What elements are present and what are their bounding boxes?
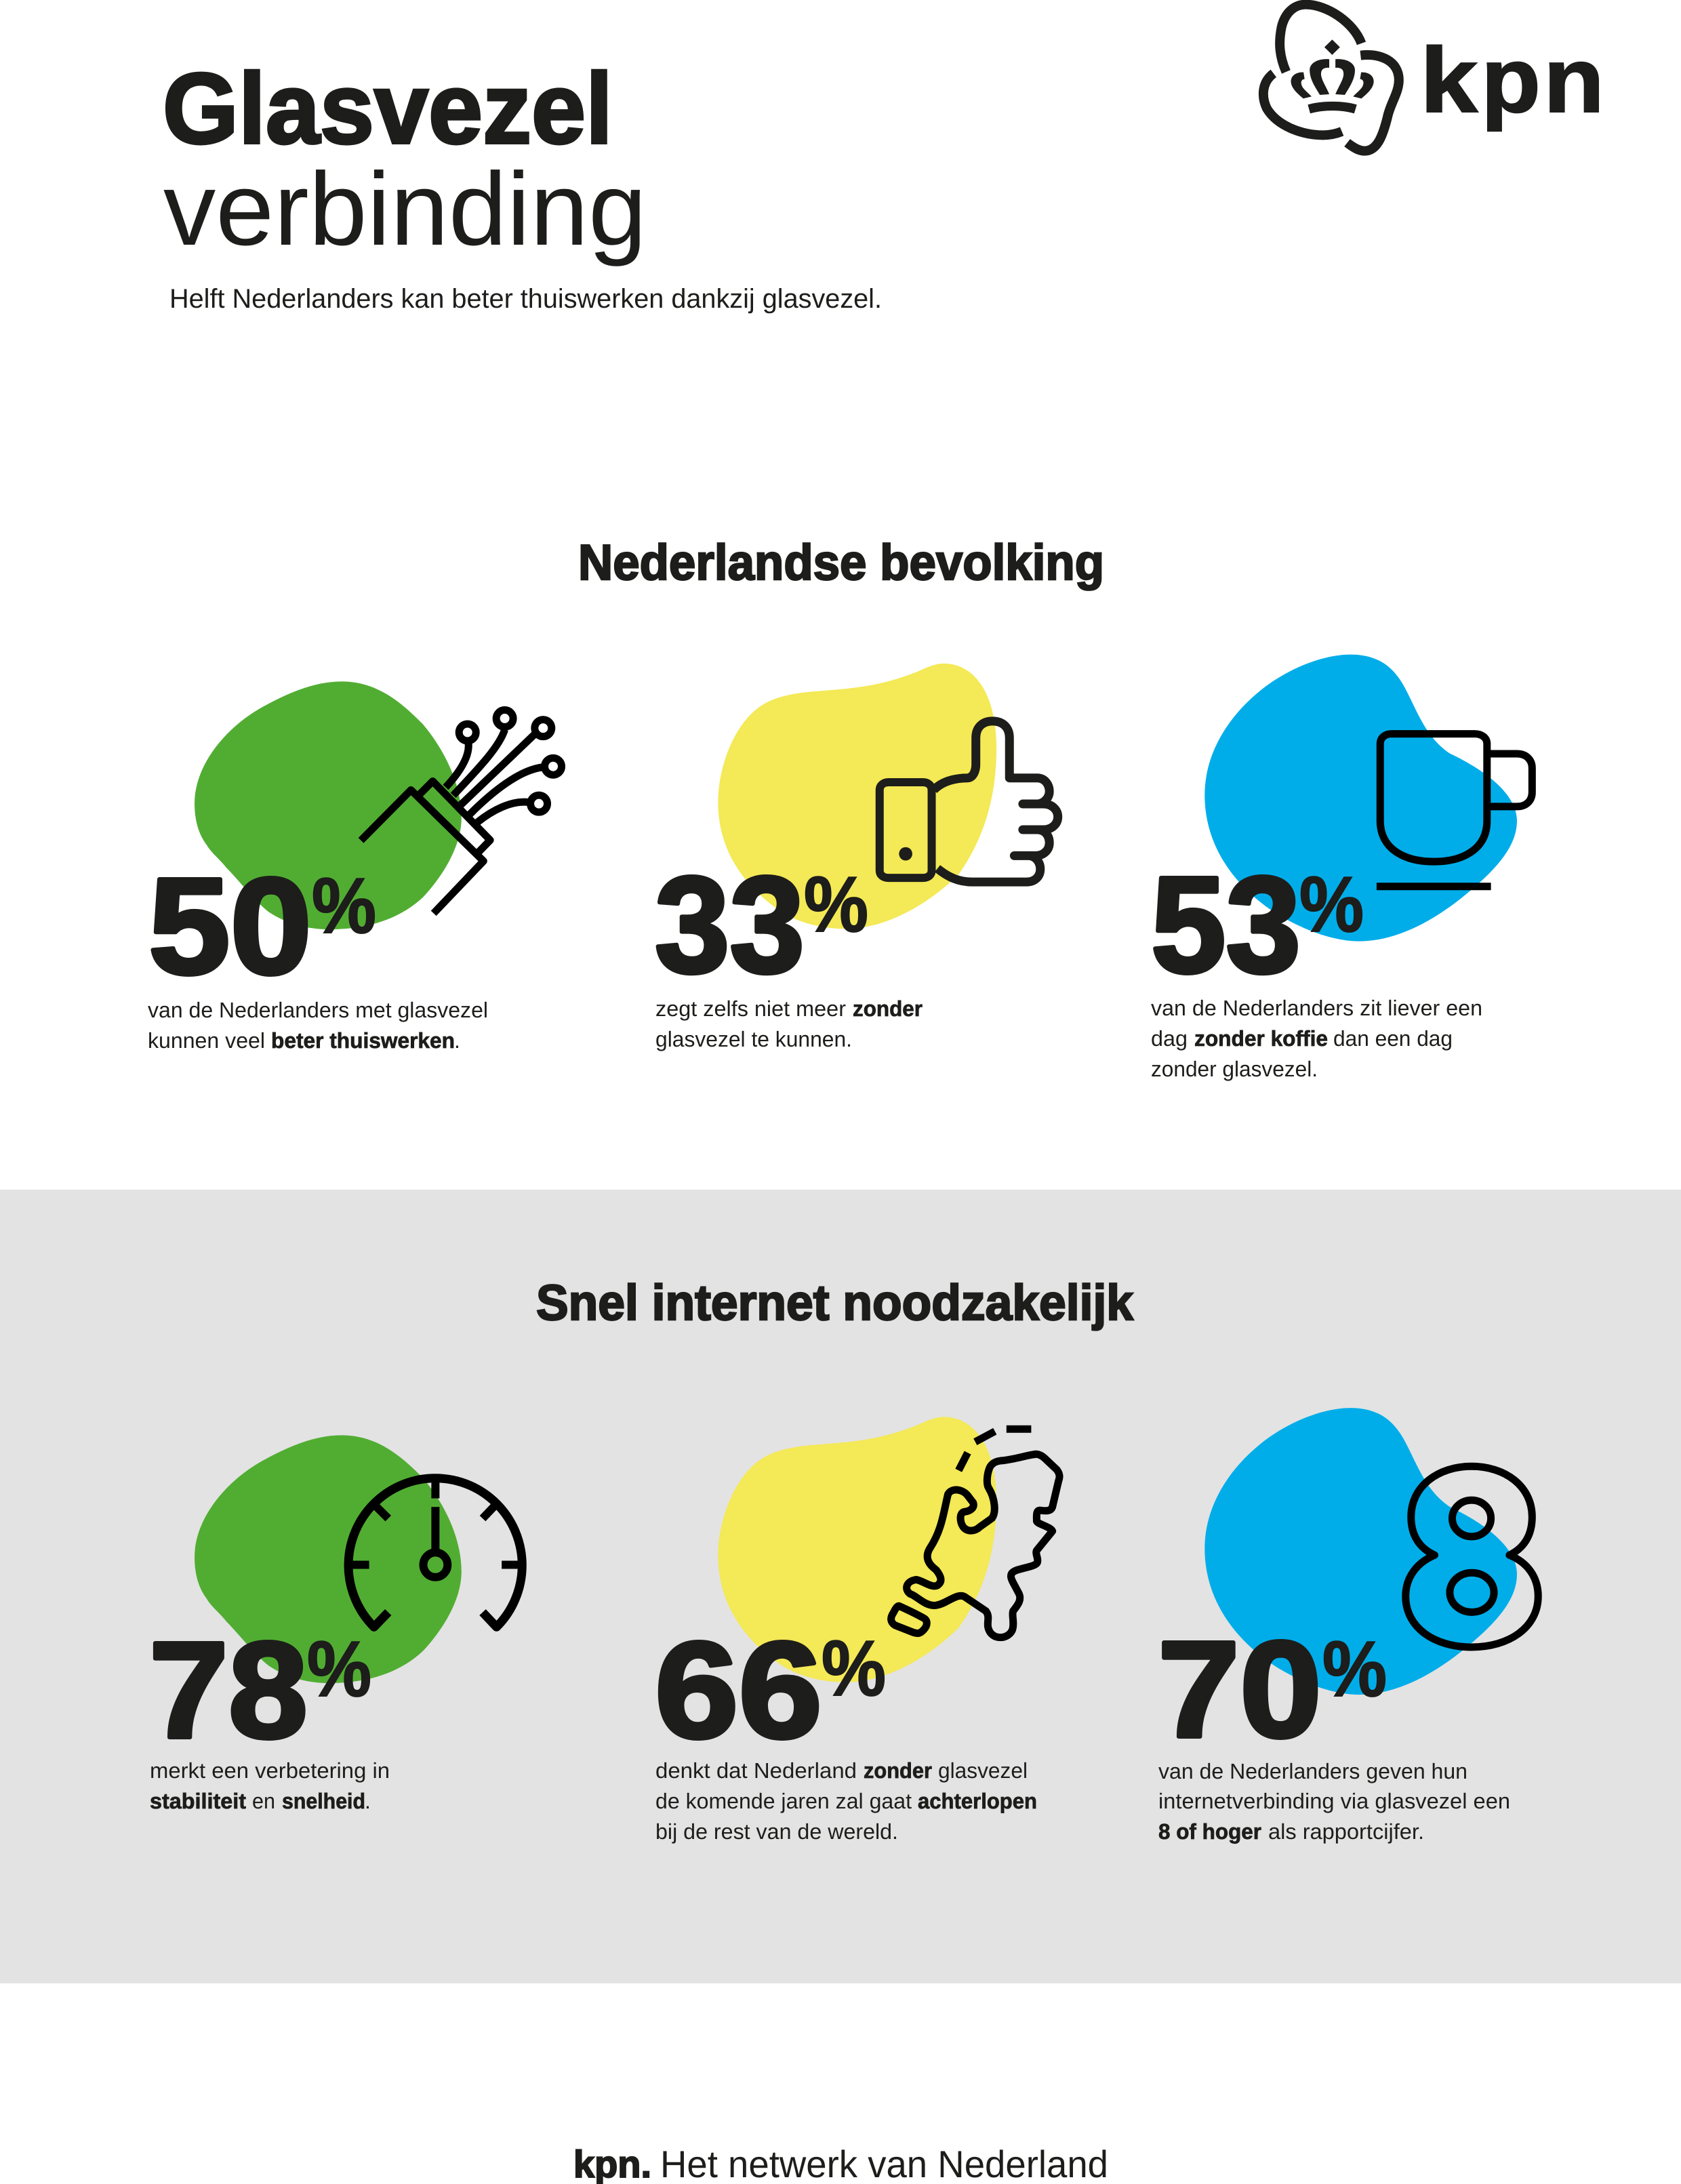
description: achterlopen [918,1789,1037,1813]
heading: Nederlandse bevolking: Nederlandse bevolking [578,534,1104,590]
percent sign: % [307,1625,371,1713]
logo wordmark: k [1420,28,1478,132]
logo: kpn [1263,5,1604,151]
icon: speedometer [348,1478,522,1627]
description: van de Nederlanders met glasvezel [148,998,488,1022]
panel: 70% [1158,1408,1538,1844]
description: zonder [864,1758,932,1783]
icon: thumbs up [880,721,1058,882]
description: zonder [853,996,923,1021]
description: de komende jaren zal gaat [655,1789,912,1813]
description: . [365,1789,371,1813]
logo wordmark [1420,28,1604,132]
panel: 53% [1151,655,1532,1081]
description: zegt zelfs niet meer [655,996,846,1021]
description: van de Nederlanders zit liever een [1151,996,1482,1020]
description [1158,1759,1510,1844]
description: 8 of hoger [1158,1819,1261,1844]
title: verbinding [163,151,647,267]
description: van de Nederlanders geven hun [1158,1759,1467,1783]
percent sign: % [804,860,868,948]
percent sign: % [822,1624,886,1712]
icon: fibre optic cable [361,710,562,913]
statistic: 33: 33 [655,848,805,1001]
statistic: 66: 66 [655,1613,822,1766]
percent sign: % [1322,1625,1387,1713]
panel: 33% [655,664,1058,1051]
heading: Snel internet noodzakelijk: Snel internet noodzakelijk [536,1274,1134,1331]
description: snelheid [282,1789,365,1813]
description: en [252,1789,275,1813]
blob: green [195,1435,462,1683]
statistic: 70: 70 [1158,1613,1322,1766]
icon: coffee mug [1377,734,1532,887]
logo emblem: crown in three loops [1263,5,1399,151]
description: stabiliteit [150,1789,246,1813]
statistic: 50: 50 [148,849,312,1003]
title: Glasvezel [163,53,613,165]
description [148,998,488,1053]
description: dag [1151,1026,1188,1051]
description: beter thuiswerken [271,1028,455,1053]
subtitle: Helft Nederlanders kan beter thuiswerken dankzij glasvezel. [169,284,882,314]
percent sign: % [312,862,376,950]
description [150,1758,390,1813]
panel: 50% [148,681,562,1053]
description: glasvezel [938,1758,1028,1783]
blob: yellow [718,1417,996,1682]
description: glasvezel te kunnen. [655,1027,852,1051]
description: bij de rest van de wereld. [655,1819,898,1844]
logo wordmark: n [1543,28,1604,132]
statistic: 53: 53 [1151,848,1301,1001]
description: zonder koffie [1194,1026,1328,1051]
logo wordmark: p [1481,28,1541,132]
description [1151,996,1482,1081]
statistic: 78: 78 [149,1613,308,1766]
description: internetverbinding via glasvezel een [1158,1789,1510,1813]
description: dan een dag [1333,1026,1453,1051]
description: denkt dat Nederland [655,1758,857,1783]
panel: 78% [149,1435,522,1813]
blob: blue [1204,655,1517,942]
description: kunnen veel [148,1028,265,1053]
blob: yellow [718,664,996,929]
description [655,1758,1037,1844]
title [163,53,647,267]
description: zonder glasvezel. [1151,1057,1318,1081]
panel: 66% [655,1417,1059,1844]
percent sign: % [1299,860,1364,948]
icon: map of the Netherlands [891,1429,1059,1638]
icon: outlined number 8 [1406,1466,1538,1647]
blob: green [195,681,462,929]
blob: blue [1204,1408,1517,1695]
description: als rapportcijfer. [1268,1819,1424,1844]
description: merkt een verbetering in [150,1758,390,1783]
description [655,996,923,1051]
grey section background [0,1190,1681,1983]
description: . [454,1028,460,1053]
